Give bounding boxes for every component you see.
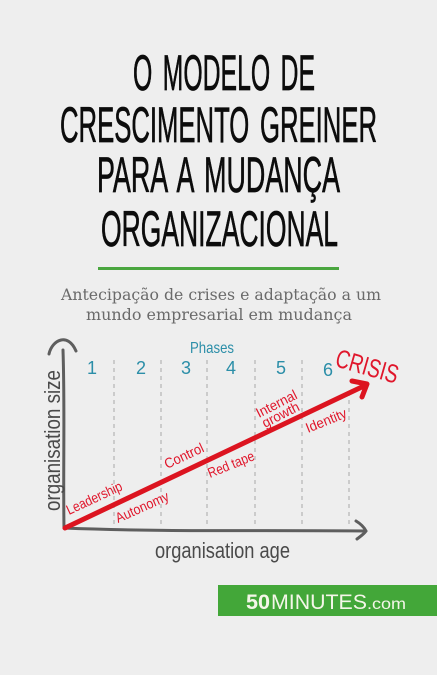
phase labels: Identity bbox=[303, 405, 349, 436]
x axis label: organisation age bbox=[155, 538, 290, 563]
phase labels: Red tape bbox=[205, 448, 257, 481]
y axis arrow bbox=[49, 340, 76, 528]
y axis label: organisation size bbox=[40, 370, 65, 511]
phase labels bbox=[64, 386, 349, 526]
phase labels: Leadership bbox=[64, 478, 125, 518]
phase labels: Internal bbox=[253, 386, 300, 421]
phases label: Phases bbox=[190, 340, 234, 357]
phase labels: growth bbox=[259, 398, 302, 431]
phase labels: Control bbox=[162, 439, 206, 472]
publisher logo banner: .com bbox=[367, 596, 406, 613]
subtitle: mundo empresarial em mudança bbox=[86, 306, 352, 324]
phase numbers: 1 bbox=[87, 358, 97, 378]
phase labels: Autonomy bbox=[113, 488, 171, 526]
phase numbers bbox=[87, 358, 333, 380]
publisher logo banner bbox=[218, 585, 437, 616]
phase numbers: 4 bbox=[226, 358, 236, 378]
chart: Greiner growth model bbox=[40, 340, 402, 563]
phase numbers: 2 bbox=[136, 358, 146, 378]
publisher logo banner: MINUTES bbox=[271, 591, 367, 614]
x axis arrow bbox=[64, 521, 366, 539]
subtitle bbox=[60, 286, 381, 324]
green divider bbox=[98, 267, 339, 270]
phase numbers: 3 bbox=[181, 358, 191, 378]
growth arrow bbox=[65, 381, 367, 528]
publisher logo banner: 50 bbox=[246, 591, 270, 614]
subtitle: Antecipação de crises e adaptação a um bbox=[60, 286, 381, 304]
crisis label: CRISIS bbox=[332, 343, 402, 389]
phase numbers: 5 bbox=[276, 358, 286, 378]
title bbox=[60, 45, 377, 257]
phase numbers: 6 bbox=[323, 360, 333, 380]
